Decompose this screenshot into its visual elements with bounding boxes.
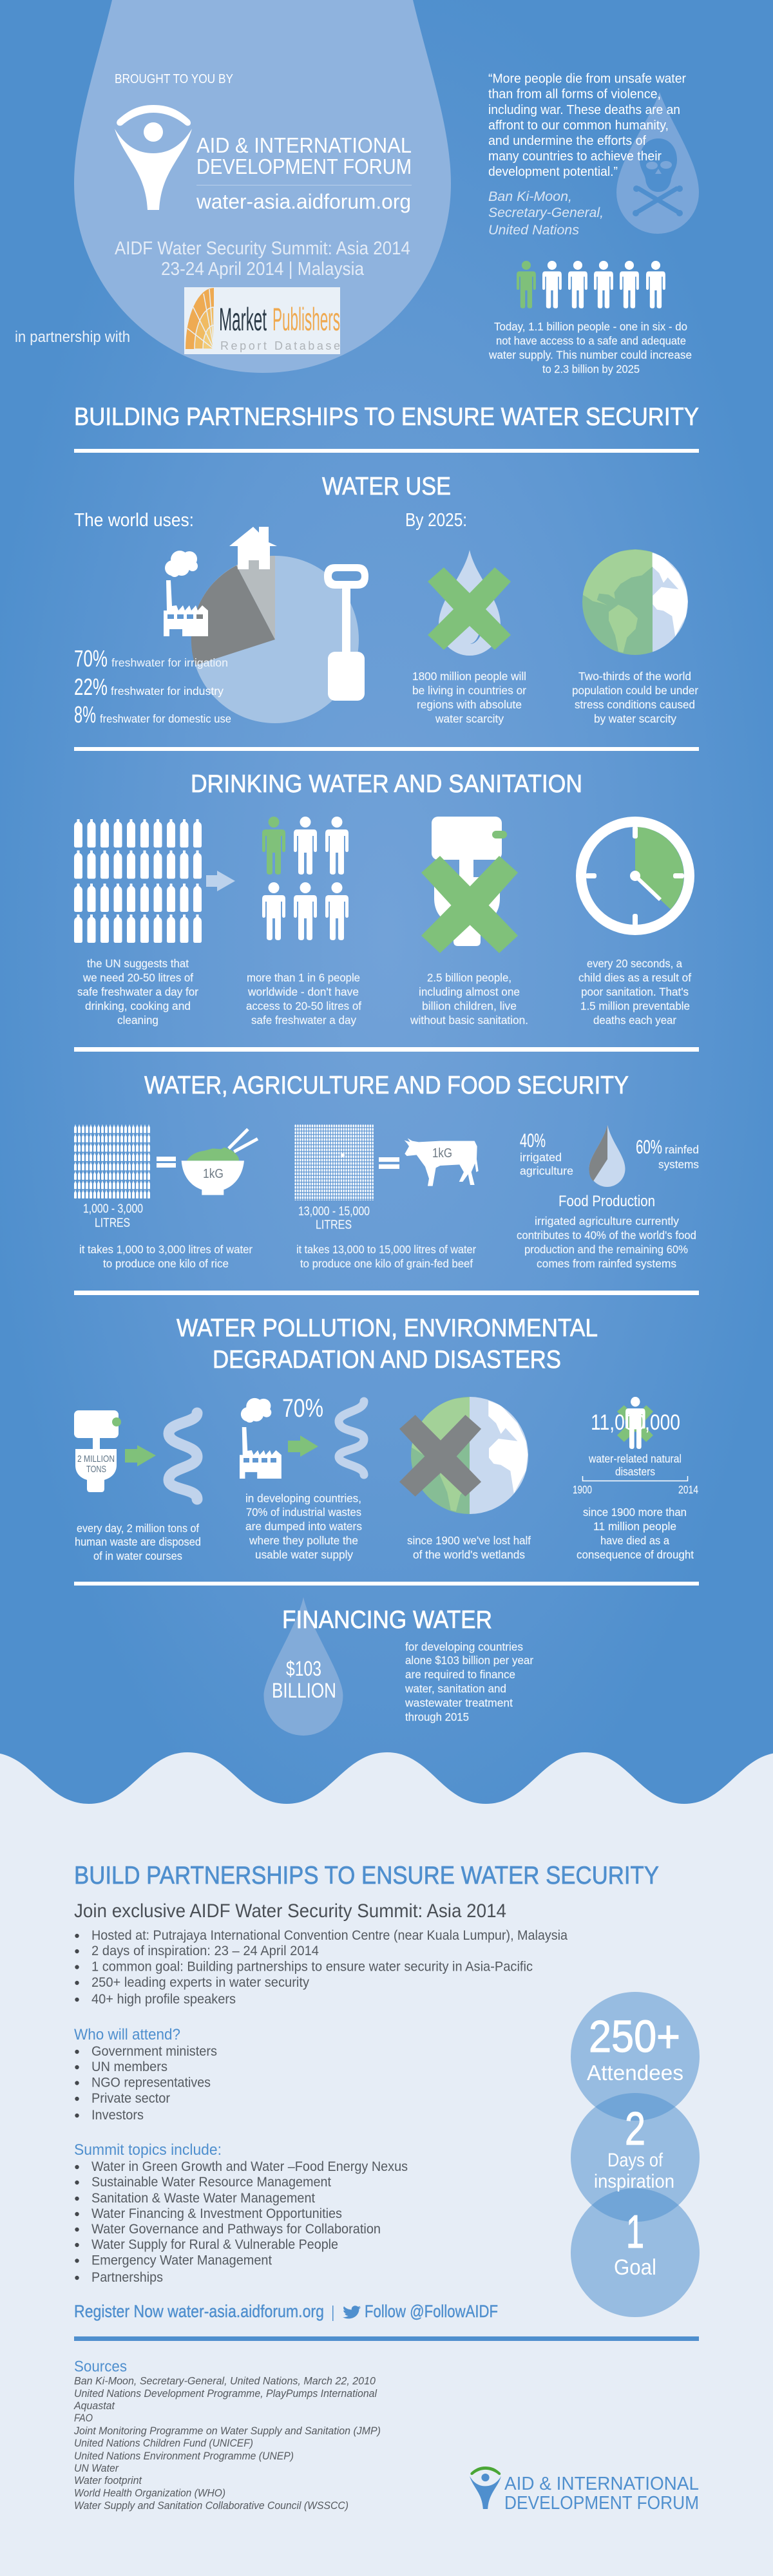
- text: industrial wastes: in developing countries,: [245, 1492, 361, 1505]
- text: one in six: worldwide - don't have: [247, 985, 359, 998]
- pie chart: water use: [191, 556, 359, 723]
- icon: toilet two million tons: [74, 1410, 121, 1492]
- timeline 1900 to 2014: 1900: [573, 1483, 592, 1496]
- quote: than from all forms of violence,: [488, 88, 661, 102]
- timeline 1900 to 2014: water-related natural: [588, 1452, 682, 1465]
- attendee list: NGO representatives: [91, 2075, 211, 2090]
- topics list: Water Governance and Pathways for Collaboration: [91, 2222, 381, 2237]
- text: 2.5 billion: [410, 971, 528, 1027]
- summit facts list: 2 days of inspiration: 23 – 24 April 2014: [91, 1944, 319, 1958]
- summit name and dates: AIDF Water Security Summit: Asia 2014: [115, 238, 410, 259]
- summit facts list: Hosted at: Putrajaya International Convention Centre (near Kuala Lumpur), Malaysia: [91, 1928, 568, 1943]
- icon: person with green cross and figure: [591, 1397, 680, 1449]
- text: two-thirds: by water scarcity: [594, 712, 676, 725]
- icon: factory: [164, 551, 208, 636]
- sources list: World Health Organization (WHO): [74, 2487, 225, 2499]
- text: rice: it takes 1,000 to 3,000 litres of water: [79, 1243, 253, 1256]
- label: 60% rainfed systems: 60%: [636, 1137, 662, 1158]
- figure: $103 billion: $103: [286, 1657, 321, 1680]
- attendee list: Investors: [91, 2108, 144, 2123]
- text: human waste: human waste are disposed: [75, 1535, 201, 1548]
- topics list: Emergency Water Management: [91, 2253, 272, 2268]
- heading: drinking water and sanitation: DRINKING WATER AND SANITATION: [191, 770, 582, 798]
- text: every 20 seconds: 1.5 million preventable: [580, 999, 690, 1012]
- text: food production: production and the remaining 60%: [524, 1243, 688, 1256]
- icon: split drop: [589, 1125, 625, 1187]
- stat circles: inspiration: [594, 2171, 674, 2192]
- text: two-thirds: population could be under: [572, 684, 698, 697]
- text: 2.5 billion: without basic sanitation.: [410, 1014, 528, 1027]
- footer AIDF logo: DEVELOPMENT FORUM: [504, 2493, 699, 2514]
- equals sign: [157, 1157, 176, 1168]
- icon: person with green cross and figure: 11,000,000: [591, 1410, 680, 1435]
- text: financing: water, sanitation and: [405, 1682, 506, 1695]
- label: 1,000 - 3,000 litres: 1,000 - 3,000: [83, 1202, 143, 1216]
- text: every 20 seconds: child dies as a result of: [578, 971, 691, 984]
- text: wetlands: of the world's wetlands: [413, 1548, 525, 1561]
- text: financing: for developing countries: [405, 1640, 523, 1653]
- stat circles: 250+: [589, 2011, 680, 2061]
- text: every 20 seconds: [578, 957, 691, 1027]
- subheading: food production: Food Production: [558, 1193, 655, 1210]
- stat circles: Attendees: [587, 2061, 683, 2085]
- text: un suggests: we need 20-50 litres of: [82, 971, 193, 984]
- topics list: Water Financing & Investment Opportunities: [91, 2206, 342, 2221]
- timeline 1900 to 2014: 2014: [678, 1483, 698, 1496]
- topics list: Water in Green Growth and Water –Food Energy Nexus: [91, 2159, 408, 2174]
- icon: factory and 70 percent: [240, 1394, 323, 1479]
- quote attribution: Secretary-General,: [488, 205, 604, 220]
- icon grid: beef litres bottles: [294, 1124, 374, 1200]
- text: every 20 seconds: every 20 seconds, a: [587, 957, 682, 970]
- text: 1800 million: [412, 670, 526, 725]
- text: industrial wastes: where they pollute the: [249, 1534, 358, 1547]
- register and follow row: Follow @FollowAIDF: [365, 2302, 498, 2321]
- summit facts list: 1 common goal: Building partnerships to ensure water security in Asia-Pacific: [91, 1959, 533, 1975]
- label: 40% irrigated agriculture: agriculture: [520, 1164, 573, 1177]
- sources list: FAO: [74, 2412, 93, 2424]
- sources heading: Sources: [74, 2358, 127, 2375]
- icon: factory and 70 percent: 70%: [282, 1394, 323, 1423]
- attendee list: [75, 2044, 217, 2123]
- icon: cow: [405, 1138, 479, 1186]
- attendee list: Private sector: [91, 2091, 170, 2106]
- label: 1,000 - 3,000 litres: [83, 1202, 143, 1230]
- icon: globe with grey cross: [399, 1397, 528, 1514]
- icon: polluted river: [169, 1413, 197, 1499]
- text: 2.5 billion: including almost one: [419, 985, 520, 998]
- icon: crossed toilet: [421, 817, 518, 953]
- sources list: United Nations Development Programme, PlayPumps International: [74, 2387, 377, 2400]
- text: 1800 million: regions with absolute: [417, 698, 522, 711]
- today text: [488, 320, 692, 375]
- label: 13,000 - 15,000 litres: LITRES: [316, 1218, 352, 1232]
- quote: [488, 72, 686, 179]
- label: 40% irrigated agriculture: irrigated: [520, 1151, 562, 1164]
- attendee list: Government ministers: [91, 2044, 217, 2059]
- arrow: [288, 1435, 318, 1457]
- heading: water pollution: DEGRADATION AND DISASTERS: [213, 1346, 561, 1374]
- text: industrial wastes: 70% of industrial wastes: [246, 1506, 361, 1519]
- label: 40% irrigated agriculture: 40%: [520, 1130, 546, 1151]
- water use percentages: [74, 645, 231, 728]
- icon: toilet two million tons: TONS: [86, 1464, 106, 1475]
- heading: water, agriculture and food security: WATER, AGRICULTURE AND FOOD SECURITY: [144, 1072, 629, 1099]
- today text: Today, 1.1 billion people - one in six - do: [494, 320, 687, 333]
- Market Publishers logo: Market: [219, 301, 267, 337]
- bowl label: 1kG: [203, 1167, 224, 1181]
- text: every 20 seconds: deaths each year: [593, 1014, 676, 1027]
- label: 13,000 - 15,000 litres: 13,000 - 15,000: [298, 1205, 370, 1218]
- label: 1,000 - 3,000 litres: LITRES: [95, 1217, 130, 1230]
- footer AIDF logo: [470, 2467, 699, 2514]
- text: beef: [296, 1243, 476, 1270]
- text: un suggests: the UN suggests that: [87, 957, 189, 970]
- sources list: Ban Ki-Moon, Secretary-General, United Nations, March 22, 2010: [74, 2375, 376, 2387]
- text: 1800 million: water scarcity: [435, 712, 504, 725]
- today text: not have access to a safe and adequate: [496, 334, 686, 347]
- sources list: Water Supply and Sanitation Collaborative Council (WSSCC): [74, 2499, 348, 2512]
- label: 60% rainfed systems: [636, 1137, 699, 1171]
- timeline 1900 to 2014: disasters: [615, 1465, 655, 1478]
- AIDF logo: AID & INTERNATIONAL: [196, 133, 412, 157]
- summit facts list: [75, 1928, 568, 2007]
- text: financing: [405, 1640, 533, 1723]
- figure: $103 billion: BILLION: [272, 1679, 336, 1702]
- timeline 1900 to 2014: [573, 1452, 698, 1496]
- icon grid: six people: [262, 817, 348, 940]
- figure: $103 billion: [272, 1657, 336, 1702]
- main title: BUILDING PARTNERSHIPS TO ENSURE WATER SECURITY: [74, 403, 699, 431]
- stat circles: 1: [626, 2206, 644, 2258]
- text: one in six: [246, 971, 361, 1027]
- text: 2.5 billion: billion children, live: [422, 999, 517, 1012]
- topics list: Water Supply for Rural & Vulnerable People: [91, 2237, 338, 2252]
- AIDF logo: DEVELOPMENT FORUM: [196, 155, 412, 178]
- footer AIDF logo: AID & INTERNATIONAL: [504, 2474, 699, 2494]
- text: human waste: [75, 1522, 201, 1562]
- text: 1800 million: be living in countries or: [412, 684, 526, 697]
- topics list: Partnerships: [91, 2270, 163, 2285]
- stat circles: Days of: [607, 2150, 663, 2171]
- label: 60% rainfed systems: systems: [658, 1158, 699, 1171]
- text: rice: to produce one kilo of rice: [103, 1257, 229, 1270]
- icon: shovel: [324, 564, 368, 701]
- quote: development potential.”: [488, 165, 618, 179]
- text: industrial wastes: [245, 1492, 362, 1561]
- icon grid: rice litres bottles: [74, 1124, 151, 1199]
- summit name and dates: 23-24 April 2014 | Malaysia: [161, 259, 365, 279]
- text: un suggests: cleaning: [117, 1014, 158, 1027]
- water use percentages: 8%: [74, 701, 96, 728]
- register and follow row: Register Now water-asia.aidforum.org: [74, 2302, 324, 2321]
- heading: water pollution: [177, 1314, 598, 1374]
- text: un suggests: drinking, cooking and: [85, 999, 191, 1012]
- water use percentages: freshwater for industry: [111, 685, 224, 697]
- Market Publishers logo: [184, 287, 340, 354]
- heading: water pollution: WATER POLLUTION, ENVIRONMENTAL: [177, 1314, 598, 1342]
- text: rice: [79, 1243, 253, 1270]
- topics list: [75, 2159, 408, 2285]
- text: beef: to produce one kilo of grain-fed beef: [300, 1257, 473, 1270]
- text: financing: are required to finance: [405, 1668, 515, 1681]
- label: 60% rainfed systems: rainfed: [665, 1143, 699, 1156]
- register and follow row: [74, 2302, 498, 2321]
- AIDF logo: water-asia.aidforum.org: [196, 190, 411, 213]
- text: two-thirds: [572, 670, 698, 725]
- stat circles: [571, 1992, 700, 2317]
- arrow: [206, 871, 235, 891]
- quote: “More people die from unsafe water: [488, 72, 686, 86]
- text: two-thirds: Two-thirds of the world: [578, 670, 691, 683]
- text: industrial wastes: usable water supply: [255, 1548, 353, 1561]
- heading: financing water: FINANCING WATER: [282, 1606, 492, 1634]
- summit facts list: 250+ leading experts in water security: [91, 1975, 309, 1990]
- sources list: Water footprint: [74, 2474, 142, 2486]
- arrow: [125, 1445, 156, 1466]
- quote attribution: Ban Ki-Moon,: [488, 189, 572, 204]
- text: drought: 11 million people: [593, 1520, 676, 1533]
- quote: many countries to achieve their: [488, 149, 662, 164]
- text: financing: through 2015: [405, 1710, 469, 1723]
- text: industrial wastes: are dumped into waters: [245, 1520, 362, 1533]
- text: beef: it takes 13,000 to 15,000 litres of water: [296, 1243, 476, 1256]
- quote: and undermine the efforts of: [488, 134, 646, 148]
- stat circles: Goal: [614, 2255, 656, 2280]
- sources list: Joint Monitoring Programme on Water Supply and Sanitation (JMP): [73, 2425, 381, 2437]
- icon: clock: [581, 822, 689, 930]
- water use percentages: freshwater for irrigation: [111, 656, 228, 669]
- icon: crossed water drop: [428, 550, 511, 656]
- wave: pale lower panel: [0, 1752, 773, 2576]
- label: 13,000 - 15,000 litres: [298, 1205, 370, 1232]
- subheading: summit topics: Summit topics include:: [74, 2141, 222, 2159]
- in partnership with: in partnership with: [15, 328, 130, 346]
- subheading: the world uses: The world uses:: [74, 510, 194, 531]
- icon: toilet two million tons: 2 MILLION: [77, 1454, 115, 1464]
- water use percentages: 22%: [74, 674, 108, 700]
- text: financing: alone $103 billion per year: [405, 1654, 533, 1667]
- sources list: Aquastat: [73, 2400, 115, 2412]
- text: food production: contributes to 40% of the world's food: [517, 1229, 696, 1242]
- brought to you by: BROUGHT TO YOU BY: [115, 72, 233, 86]
- topics list: Sustainable Water Resource Management: [91, 2175, 331, 2190]
- text: drought: consequence of drought: [577, 1548, 694, 1561]
- icon: rice bowl: [182, 1129, 258, 1195]
- text: Publishers: [272, 301, 340, 337]
- text: 2.5 billion: 2.5 billion people,: [427, 971, 511, 984]
- icon grid: bottles: [74, 819, 202, 943]
- text: food production: [517, 1215, 696, 1270]
- sources list: UN Water: [74, 2462, 119, 2474]
- text: un suggests: [77, 957, 198, 1027]
- icon: polluted river: [339, 1401, 364, 1475]
- text: food production: irrigated agriculture currently: [535, 1215, 679, 1227]
- text: drought: since 1900 more than: [583, 1506, 687, 1519]
- text: wetlands: since 1900 we've lost half: [407, 1534, 531, 1547]
- water use percentages: freshwater for domestic use: [100, 712, 231, 725]
- text: wetlands: [407, 1534, 531, 1561]
- text: one in six: access to 20-50 litres of: [246, 999, 361, 1012]
- text: one in six: safe freshwater a day: [251, 1014, 356, 1027]
- skull drop icon: [616, 92, 699, 234]
- text: two-thirds: stress conditions caused: [575, 698, 695, 711]
- equals sign: [379, 1157, 399, 1169]
- text: every 20 seconds: poor sanitation. That's: [581, 985, 689, 998]
- topics list: Sanitation & Waste Water Management: [91, 2191, 315, 2206]
- water use percentages: 70%: [74, 645, 108, 672]
- quote: affront to our common humanity,: [488, 118, 669, 133]
- text: human waste: every day, 2 million tons of: [77, 1522, 199, 1535]
- text: financing: wastewater treatment: [405, 1696, 513, 1709]
- icon: house: [229, 527, 277, 569]
- stat circles: 2: [625, 2103, 645, 2155]
- icon: globe two thirds: [582, 549, 688, 656]
- quote attribution: [488, 189, 604, 238]
- subheading: join summit: Join exclusive AIDF Water Security Summit: Asia 2014: [74, 1900, 506, 1922]
- subheading: by 2025: By 2025:: [405, 510, 467, 531]
- sources list: [73, 2375, 381, 2512]
- text: human waste: of in water courses: [93, 1549, 182, 1562]
- heading: water use: WATER USE: [322, 473, 451, 500]
- summit name and dates: [115, 238, 410, 279]
- today text: water supply. This number could increase: [488, 348, 692, 361]
- label: 40% irrigated agriculture: [520, 1130, 573, 1177]
- quote attribution: United Nations: [488, 223, 580, 238]
- text: drought: have died as a: [600, 1534, 669, 1547]
- quote: including war. These deaths are an: [488, 103, 680, 117]
- cow label: 1kG: [432, 1146, 452, 1160]
- header drop panel: [74, 0, 451, 373]
- AIDF logo: [115, 105, 412, 213]
- text: drought: [577, 1506, 694, 1561]
- text: one in six: more than 1 in 6 people: [247, 971, 360, 984]
- financing drop: [264, 1597, 343, 1736]
- text: un suggests: safe freshwater a day for: [77, 985, 198, 998]
- sources list: United Nations Children Fund (UNICEF): [74, 2437, 253, 2449]
- heading: build partnerships: BUILD PARTNERSHIPS TO ENSURE WATER SECURITY: [74, 1862, 659, 1889]
- attendee list: UN members: [91, 2060, 167, 2074]
- subheading: who will attend: Who will attend?: [74, 2026, 180, 2043]
- people row: one in six: [517, 261, 665, 308]
- summit facts list: 40+ high profile speakers: [91, 1992, 236, 2007]
- text: food production: comes from rainfed systems: [537, 1257, 676, 1270]
- sources list: United Nations Environment Programme (UNEP): [74, 2450, 294, 2462]
- today text: to 2.3 billion by 2025: [542, 363, 640, 375]
- Market Publishers logo: Report Database: [220, 339, 340, 352]
- text: 1800 million: 1800 million people will: [412, 670, 526, 683]
